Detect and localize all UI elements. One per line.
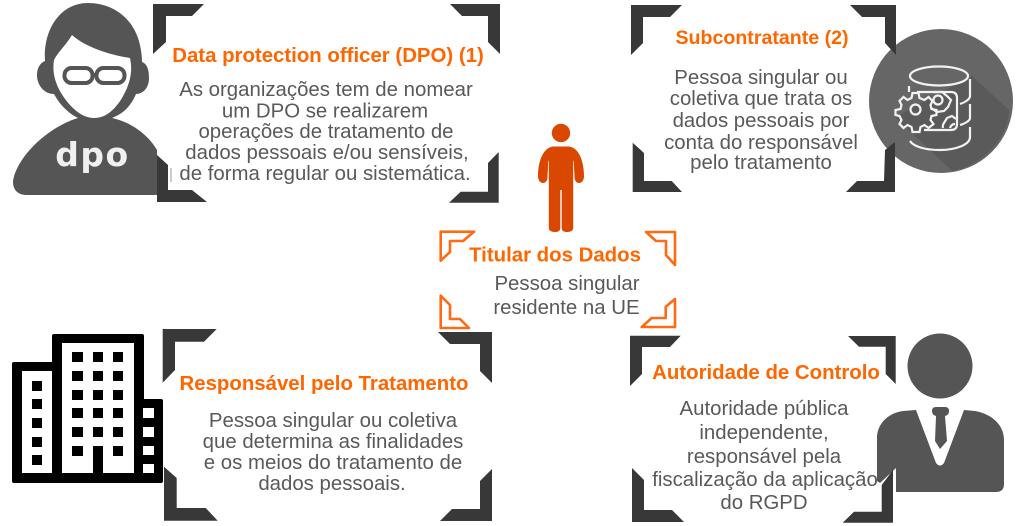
heading: DPO: Data protection officer (DPO) (1) (172, 45, 484, 67)
bracket corners: autoridade (630, 336, 896, 523)
text block: autoridade: fiscalização da aplicação (652, 469, 878, 491)
text block: responsavel: que determina as finalidades (203, 431, 463, 453)
text block: autoridade: responsável pela (687, 446, 842, 468)
text block: responsavel: dados pessoais. (258, 473, 406, 495)
icon: office buildings (14, 336, 161, 481)
text block: autoridade: do RGPD (720, 492, 808, 514)
heading: subcontratante: Subcontratante (2) (675, 27, 849, 49)
text block: subcontratante: dados pessoais por (673, 110, 850, 132)
bracket corners: subcontratante (631, 5, 896, 192)
text block: subcontratante: pelo tratamento (690, 152, 832, 174)
text block: subcontratante: conta do responsável (664, 132, 858, 154)
text block: subcontratante: Pessoa singular ou (674, 67, 848, 89)
orange bracket corners (441, 232, 675, 328)
text block: autoridade: Autoridade pública (680, 398, 849, 420)
text block: DPO: um DPO se realizarem (222, 100, 428, 122)
text block: DPO: As organizações tem de nomear (179, 79, 473, 101)
heading: titular: Titular dos Dados (469, 244, 641, 266)
text block: subcontratante: coletiva que trata os (670, 88, 852, 110)
icon: dpo person: dpo (55, 135, 130, 174)
text block: DPO: operações de tratamento de (198, 121, 454, 143)
text block: DPO: dados pessoais e/ou sensíveis, (185, 142, 469, 164)
panel: data protection officer (153, 4, 500, 203)
panel: titular dos dados (441, 232, 675, 328)
icon: dpo person (13, 3, 157, 195)
heading: autoridade: Autoridade de Controlo (652, 362, 880, 384)
text block: autoridade: independente, (699, 422, 829, 444)
icon: person subject (538, 124, 584, 232)
bracket corners: DPO (153, 4, 500, 203)
text block: DPO: de forma regular ou sistemática. (179, 163, 471, 185)
heading: responsavel: Responsável pelo Tratamento (180, 373, 468, 395)
icon: suited person (877, 334, 1004, 492)
text block: responsavel: e os meios do tratamento de (204, 452, 462, 474)
panel: autoridade de controlo (630, 336, 896, 523)
icon: database with gears (869, 29, 1013, 173)
text block: titular: residente na UE (493, 297, 640, 319)
text block: titular: Pessoa singular (494, 273, 640, 295)
panel: subcontratante (631, 5, 896, 192)
panel: responsavel pelo tratamento (163, 329, 492, 521)
bracket corners: responsavel (163, 329, 492, 521)
text block: responsavel: Pessoa singular ou coletiva (209, 410, 458, 432)
